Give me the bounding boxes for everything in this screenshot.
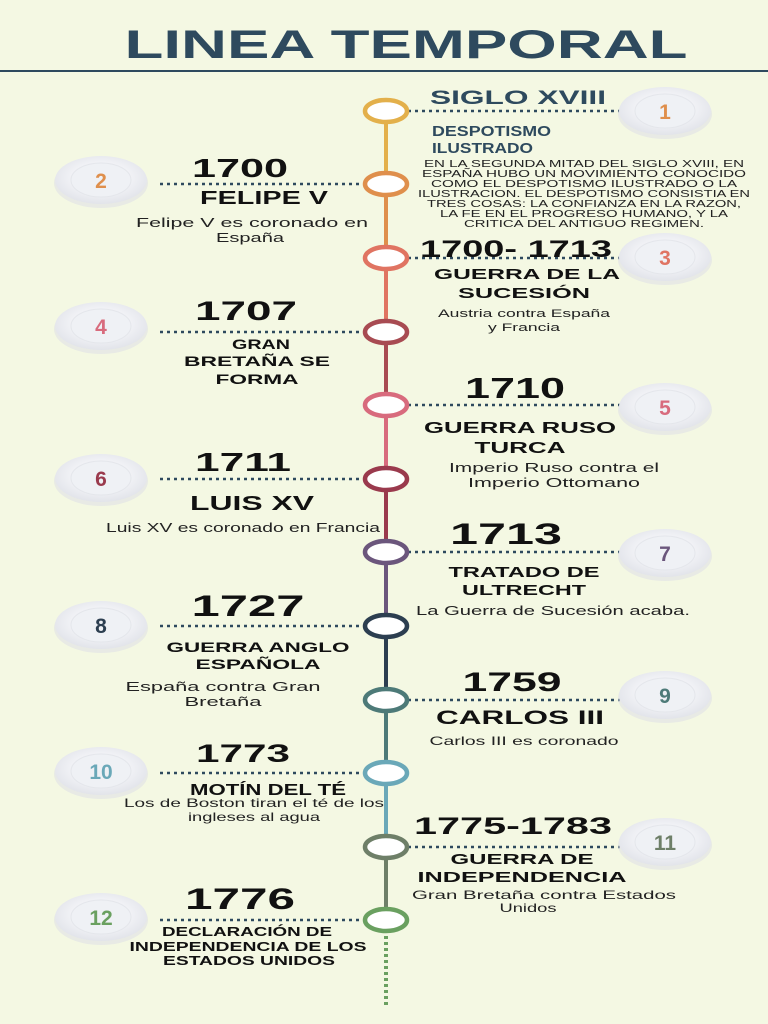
- right events: GUERRA DE LA: [434, 266, 620, 283]
- right events: 1775-1783: [414, 813, 612, 840]
- left events: INDEPENDENCIA DE LOS: [130, 940, 366, 954]
- event 1: siglo XVIII: SIGLO XVIII: [430, 88, 606, 109]
- left events: GUERRA ANGLO: [166, 639, 350, 655]
- left events: [106, 153, 384, 968]
- connector dotted lines: [160, 111, 620, 920]
- right events: Gran Bretaña contra Estados: [412, 888, 676, 902]
- event 1: siglo XVIII: LA FE EN EL PROGRESO HUMANO, Y LA: [440, 209, 728, 220]
- left events: Bretaña: [184, 694, 263, 709]
- right events: Imperio Ruso contra el: [449, 460, 659, 475]
- event 1: siglo XVIII: DESPOTISMO: [432, 123, 551, 140]
- number badges: 10: [89, 761, 113, 784]
- event 1: siglo XVIII: CRITICA DEL ANTIGUO REGIMEN.: [464, 219, 704, 230]
- left events: 1711: [195, 447, 291, 477]
- left events: DECLARACIÓN DE: [162, 924, 332, 939]
- right events: TRATADO DE: [448, 564, 600, 581]
- left events: GRAN: [232, 336, 290, 352]
- left events: Felipe V es coronado en: [136, 215, 368, 230]
- number badges: 2: [95, 170, 107, 193]
- right events: Imperio Ottomano: [468, 475, 640, 490]
- event 1: siglo XVIII: EN LA SEGUNDA MITAD DEL SIGLO XVIII, EN: [424, 159, 744, 170]
- left events: Los de Boston tiran el té de los: [124, 796, 384, 810]
- event 1: siglo XVIII: ESPAÑA HUBO UN MOVIMIENTO CONOCIDO: [422, 167, 746, 180]
- event 1: siglo XVIII: ILUSTRADO: [432, 140, 533, 157]
- number badges: 1: [659, 101, 671, 124]
- left events: Luis XV es coronado en Francia: [106, 521, 380, 535]
- right events: Unidos: [500, 901, 556, 915]
- right events: TURCA: [474, 440, 566, 457]
- left events: ESTADOS UNIDOS: [163, 954, 335, 968]
- event 1: siglo XVIII: COMO EL DESPOTISMO ILUSTRADO O LA: [431, 179, 737, 190]
- right events: CARLOS III: [436, 708, 604, 729]
- right events: La Guerra de Sucesión acaba.: [416, 603, 690, 618]
- left events: 1773: [196, 740, 290, 768]
- event 1: siglo XVIII: ILUSTRACION. EL DESPOTISMO CONSISTIA EN: [418, 189, 750, 200]
- left events: 1776: [185, 883, 295, 916]
- timeline spine: [384, 111, 388, 1005]
- left events: 1700: [192, 153, 288, 183]
- number badges: 11: [654, 832, 676, 855]
- left events: LUIS XV: [190, 493, 315, 515]
- number badges: 5: [659, 397, 671, 420]
- left events: FORMA: [216, 371, 298, 387]
- left events: FELIPE V: [200, 188, 328, 208]
- right events: GUERRA RUSO: [424, 420, 616, 437]
- timeline nodes: [365, 100, 407, 931]
- event 1: siglo XVIII: TRES COSAS: LA CONFIANZA EN LA RAZON,: [427, 199, 741, 210]
- right events: y Francia: [488, 322, 561, 334]
- right events: Carlos III es coronado: [430, 734, 619, 748]
- left events: España: [216, 230, 285, 245]
- number badges: 9: [659, 685, 671, 708]
- right events: 1710: [465, 373, 565, 405]
- left events: BRETAÑA SE: [184, 352, 330, 369]
- left events: España contra Gran: [126, 679, 320, 694]
- number badges: 6: [95, 468, 107, 491]
- title: LINEA TEMPORAL: [124, 23, 688, 67]
- right events: ULTRECHT: [462, 582, 586, 599]
- number badges: 7: [659, 543, 671, 566]
- left events: MOTÍN DEL TÉ: [190, 780, 346, 799]
- number badges: 4: [95, 316, 107, 339]
- right events: GUERRA DE: [450, 851, 594, 868]
- number badges: [54, 87, 712, 945]
- right events: 1700- 1713: [420, 236, 612, 263]
- left events: 1727: [192, 590, 304, 623]
- number badges: 3: [659, 247, 671, 270]
- event 1: siglo XVIII: [418, 88, 750, 230]
- right events: Austria contra España: [438, 308, 611, 320]
- right events: INDEPENDENCIA: [418, 869, 627, 886]
- right events: [412, 236, 690, 915]
- number badges: 12: [89, 907, 113, 930]
- right events: 1759: [462, 667, 562, 697]
- left events: 1707: [195, 296, 297, 326]
- left events: ingleses al agua: [188, 810, 320, 824]
- number badges: 8: [95, 615, 107, 638]
- right events: SUCESIÓN: [458, 284, 590, 302]
- right events: 1713: [450, 518, 562, 551]
- left events: ESPAÑOLA: [196, 655, 320, 672]
